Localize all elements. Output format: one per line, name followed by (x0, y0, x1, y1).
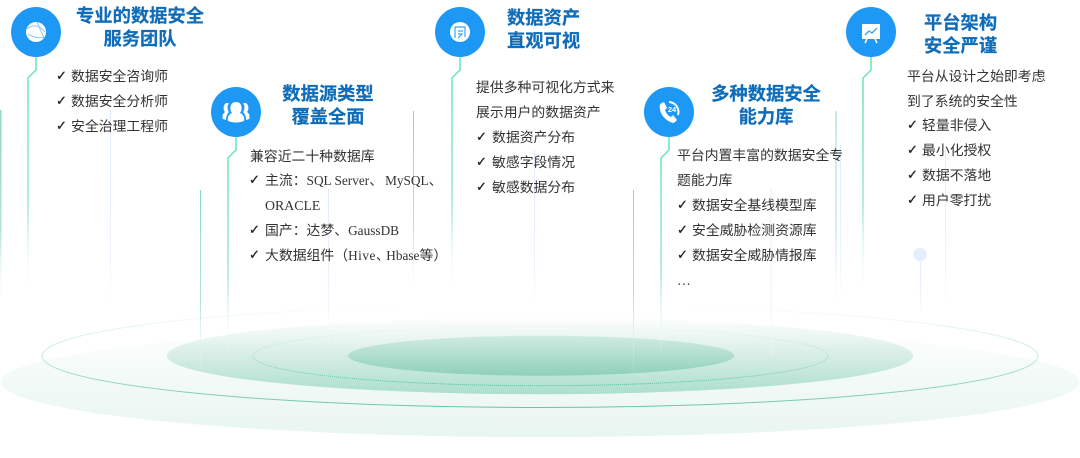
text: 数据资产分布 (492, 130, 575, 145)
text: 大数据组件（Hive、Hbase等） (265, 248, 447, 263)
text: 主流：SQL Server、MySQL、 (265, 173, 443, 188)
text: ✓ (56, 69, 67, 84)
heading (76, 5, 204, 48)
heading: 覆盖全面 (291, 106, 365, 126)
intro text (907, 69, 1045, 109)
icon: 24h phone: 24 (668, 105, 677, 114)
text: ✓ (677, 223, 688, 238)
text: ✓ (56, 94, 67, 109)
big base ellipse (1, 327, 1079, 437)
checklist (56, 69, 168, 134)
text: ✓ (56, 119, 67, 134)
text: ✓ (249, 223, 260, 238)
checklist (907, 118, 991, 208)
panel: 平台架构安全严谨 (846, 7, 1045, 208)
icon: users (211, 87, 261, 137)
heading: 多种数据安全 (711, 83, 821, 104)
middle ellipse (167, 317, 913, 394)
heading (711, 83, 821, 126)
checklist (677, 198, 817, 288)
icon: 24h phone (644, 87, 694, 137)
text: … (677, 273, 691, 288)
connector lines (28, 56, 871, 352)
vertical pale blue lines (110, 110, 946, 364)
heading (507, 7, 580, 50)
text: 用户零打扰 (922, 193, 991, 208)
icon: presentation chart (846, 7, 896, 57)
text: ✓ (249, 173, 260, 188)
text: 数据不落地 (922, 168, 991, 183)
text: 安全威胁检测资源库 (692, 223, 817, 238)
text: ✓ (677, 248, 688, 263)
text: 数据安全基线模型库 (692, 198, 817, 213)
heading: 专业的数据安全 (76, 5, 204, 26)
text: ✓ (249, 248, 260, 263)
text: ✓ (476, 180, 487, 195)
heading: 安全严谨 (924, 34, 997, 56)
text: 最小化授权 (922, 143, 991, 158)
text: 数据安全咨询师 (71, 69, 168, 84)
text: 数据安全威胁情报库 (692, 248, 817, 263)
text: ✓ (907, 143, 918, 158)
heading: 直观可视 (507, 30, 580, 50)
icon: globe (11, 7, 61, 57)
text: 平台从设计之始即考虑 (907, 69, 1045, 84)
vertical teal lines (0, 110, 836, 380)
heading: 服务团队 (103, 28, 177, 48)
text: 题能力库 (677, 173, 732, 188)
checklist (249, 173, 447, 263)
inner ellipse (348, 336, 734, 376)
icon: asset board (435, 7, 485, 57)
text: ✓ (907, 193, 918, 208)
text: ✓ (677, 198, 688, 213)
text: 国产：达梦、GaussDB (265, 223, 399, 238)
text: 展示用户的数据资产 (476, 105, 601, 120)
text: ✓ (476, 130, 487, 145)
text: ✓ (907, 118, 918, 133)
text: ✓ (907, 168, 918, 183)
panel: 数据源类型覆盖全面 (211, 83, 447, 263)
heading: 能力库 (739, 106, 793, 126)
text: 安全治理工程师 (71, 119, 168, 134)
heading (924, 12, 997, 56)
outer ring (42, 304, 1038, 408)
intro text (677, 148, 843, 188)
text: 提供多种可视化方式来 (476, 80, 614, 95)
dotted ring (253, 326, 828, 386)
pale blue dot (913, 248, 927, 261)
text: 敏感数据分布 (492, 180, 575, 195)
heading: 数据资产 (507, 7, 580, 28)
text: 数据安全分析师 (71, 94, 168, 109)
heading: 数据源类型 (282, 83, 374, 104)
heading (282, 83, 374, 126)
text: 平台内置丰富的数据安全专 (677, 148, 843, 163)
heading: 平台架构 (924, 12, 997, 33)
text: 轻量非侵入 (922, 118, 991, 133)
text: 到了系统的安全性 (907, 94, 1018, 109)
text: ✓ (476, 155, 487, 170)
intro text: 兼容近二十种数据库 (250, 149, 375, 164)
panel: 专业的数据安全服务团队 (11, 5, 204, 134)
text: 敏感字段情况 (492, 155, 575, 170)
intro text (476, 80, 614, 120)
text: ORACLE (265, 198, 320, 213)
checklist (476, 130, 575, 195)
panel: 多种数据安全能力库 (644, 83, 843, 288)
panel: 数据资产直观可视 (435, 7, 614, 195)
